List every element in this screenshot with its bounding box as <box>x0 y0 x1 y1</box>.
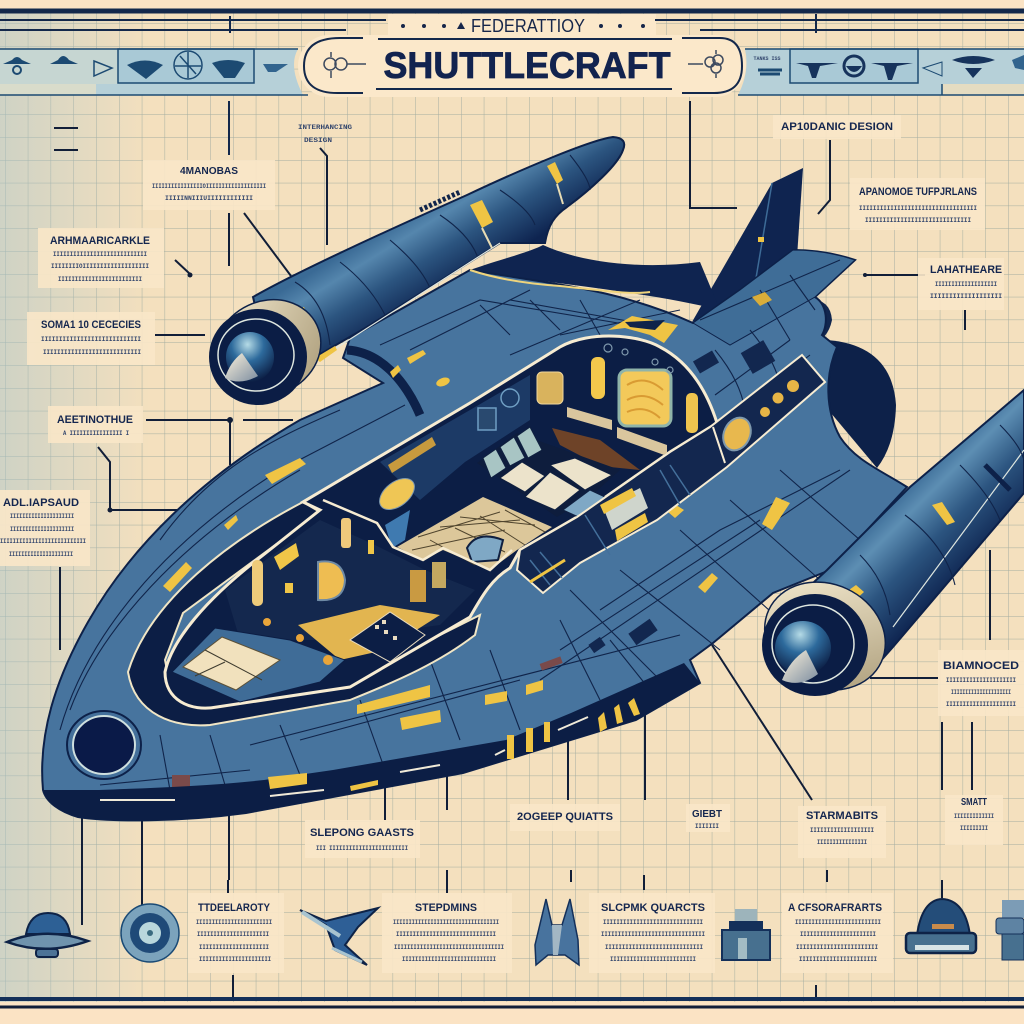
label: aerodynamic design: AP10DANIC DESION <box>781 121 893 133</box>
eyebrow dots <box>401 22 645 29</box>
label: soma: IIIIIIIIIIIIIIIIIIIIIIIIIIII <box>43 349 141 356</box>
icon: saucer 4 <box>871 63 913 80</box>
label: top centre caption: INTERHANCING <box>298 124 352 131</box>
bottom icon: pod <box>906 899 976 953</box>
hull panel lines <box>60 290 860 790</box>
label: archmaricarkle: ARHMAARICARKLE <box>50 235 150 247</box>
leader dots <box>108 272 867 512</box>
wall panel: controls <box>478 389 519 430</box>
label: archmaricarkle <box>38 228 164 288</box>
label: adlapsaud: IIIIIIIIIIIIIIIIIIIII <box>9 551 73 558</box>
wing panel lines <box>700 260 840 340</box>
label: bottom stepdmins <box>382 893 512 973</box>
sleeve window <box>600 488 648 541</box>
label: biamnoced <box>938 650 1024 716</box>
sleeve accent <box>530 560 565 582</box>
label: sleeping guests: SLEPONG GAASTS <box>310 827 414 839</box>
icon: round badge <box>844 56 864 76</box>
front bulkhead oval <box>374 472 420 516</box>
icon: flat ship <box>758 70 782 74</box>
engine shadow disc <box>820 340 896 468</box>
label: bottom tidelarity <box>188 893 284 973</box>
bottom icon: rocket <box>535 899 579 965</box>
right nacelle <box>747 390 1024 709</box>
label: bottom sleeping quarters: IIIIIIIIIIIIIIIIIIIIIIIIIIIIII <box>603 919 703 926</box>
label: bottom spacecraft parts: IIIIIIIIIIIIIIIIIIIIIII <box>799 956 877 963</box>
label: bottom spacecraft parts: IIIIIIIIIIIIIIIIIIIIIIII <box>796 944 878 951</box>
label: quarts <box>510 804 620 831</box>
main monitor <box>619 370 671 426</box>
label: soma <box>27 312 155 365</box>
lower dark skirt <box>43 663 700 820</box>
label: adlapsaud: IIIIIIIIIIIIIIIIIIIII <box>10 513 74 520</box>
title plaque <box>304 16 742 93</box>
label: bottom stepdmins: IIIIIIIIIIIIIIIIIIIIIIIIIIIII <box>402 956 496 963</box>
label: gieet: GIEBT <box>692 809 722 820</box>
label: smatt: IIIIIIIII <box>960 825 988 832</box>
sleeve lights <box>760 380 799 417</box>
label: quarts: 2OGEEP QUIATTS <box>517 811 613 823</box>
wing plate <box>693 250 855 345</box>
label: starmabits: STARMABITS <box>806 810 878 822</box>
rear engine bump <box>800 299 832 345</box>
label: bottom stepdmins: STEPDMINS <box>415 902 477 914</box>
arch icons <box>604 344 673 373</box>
stepped partition edge <box>323 500 512 570</box>
label: bottom tidelarity: IIIIIIIIIIIIIIIIIIIII <box>199 944 269 951</box>
pylon dark arc <box>347 350 420 415</box>
nose port <box>67 711 141 779</box>
label: gieet <box>686 804 730 832</box>
icon: gem saucer 2 <box>212 60 245 78</box>
label: aeetinothue <box>48 406 143 443</box>
label: soma: IIIIIIIIIIIIIIIIIIIIIIIIIIII <box>41 336 141 343</box>
label: amanobas: 4MANOBAS <box>180 166 238 177</box>
front chamber wall <box>225 520 475 640</box>
bottom icon: partial module <box>996 900 1024 960</box>
label: aeetinothue: A IIIIIIIIIIIIIIII I <box>63 430 129 437</box>
header rules <box>0 11 1024 155</box>
label: gieet: IIIIIII <box>695 823 719 830</box>
label: biamnoced: BIAMNOCED <box>943 660 1019 672</box>
icon: saucer 1 <box>3 57 31 74</box>
icon: right emblem <box>688 50 723 78</box>
label: smatt: SMATT <box>961 797 987 808</box>
top nacelle <box>199 137 624 413</box>
bench strips <box>567 407 667 456</box>
label: lahatheare: IIIIIIIIIIIIIIIIIII <box>930 293 1002 300</box>
hull hatch panels <box>588 340 775 653</box>
icon: saucer 2 <box>50 56 78 64</box>
label: bottom spacecraft parts <box>782 893 893 973</box>
label: biamnoced: IIIIIIIIIIIIIIIIIIIII <box>946 677 1016 684</box>
label: adlapsaud: IIIIIIIIIIIIIIIIIIIII <box>10 526 74 533</box>
front console <box>350 612 425 662</box>
label: archmaricarkle: IIIIIIIIIIIIIIIIIIIIIIIIIIII <box>53 251 147 258</box>
blue door panel <box>385 510 410 548</box>
yellow bar light <box>591 357 605 399</box>
front floor <box>298 605 440 660</box>
icon: small ship <box>1012 55 1024 70</box>
label: apanomoe: IIIIIIIIIIIIIIIIIIIIIIIIIIIIIIIIII <box>859 205 977 212</box>
bottom rules <box>0 999 1024 1007</box>
nacelle grille <box>420 192 460 210</box>
bottom icon: module <box>722 909 770 960</box>
label: bottom sleeping quarters: IIIIIIIIIIIIIIIIIIIIIIIIIIIII <box>605 944 703 951</box>
title plaque background <box>298 14 746 97</box>
label: bottom stepdmins: IIIIIIIIIIIIIIIIIIIIIIIIIIIIIIIIII <box>394 944 504 951</box>
label: apanomoe: IIIIIIIIIIIIIIIIIIIIIIIIIIIIII <box>865 217 971 224</box>
title: SHUTTLECRAFT <box>384 45 671 86</box>
label: lahatheare: IIIIIIIIIIIIIIIIIII <box>935 281 997 288</box>
label: bottom tidelarity: IIIIIIIIIIIIIIIIIIIIII <box>197 931 269 938</box>
cutaway shell <box>165 336 717 708</box>
top engine nozzle <box>199 283 337 413</box>
icon: gem saucer <box>127 60 163 79</box>
label: bottom sleeping quarters: IIIIIIIIIIIIIIIIIIIIIIIIII <box>610 956 696 963</box>
dorsal gold line <box>470 270 650 293</box>
sleeve oval light <box>718 413 756 455</box>
yellow panel tag <box>752 292 772 306</box>
label: aerodynamic design <box>773 115 901 139</box>
small caption: TANKS ISS <box>753 56 781 62</box>
label: adlapsaud: ADL.IAPSAUD <box>3 497 79 509</box>
icon: globe <box>174 51 202 79</box>
eyebrow: federation: FEDERATTIOY <box>471 16 585 36</box>
label: bottom spacecraft parts: IIIIIIIIIIIIIIIIIIIIIII <box>800 931 876 938</box>
label: bottom stepdmins: IIIIIIIIIIIIIIIIIIIIIIIIIIIIII <box>396 931 496 938</box>
yellow control panel on dorsal hull <box>608 316 678 343</box>
icon: left emblem <box>324 52 366 78</box>
yellow hull markings <box>163 458 790 791</box>
label: bottom spacecraft parts: A CFSORAFRARTS <box>788 902 882 914</box>
plaque frame <box>304 38 742 93</box>
label: top centre caption <box>298 124 352 144</box>
header band: right icon strip <box>738 49 1024 95</box>
label: amanobas: IIIIIIIIIIIIIIIIOIIIIIIIIIIIIIIIIIII <box>152 183 266 190</box>
label: lahatheare: LAHATHEARE <box>930 264 1002 276</box>
brown ledge <box>552 428 640 470</box>
red hull marks <box>172 656 563 787</box>
front bench base <box>172 628 345 702</box>
label: amanobas <box>143 160 275 210</box>
front wall lights <box>252 518 446 606</box>
mosaic display <box>537 372 563 404</box>
label: adlapsaud <box>0 490 90 566</box>
right engine nozzle <box>747 563 903 709</box>
sofa <box>477 427 620 520</box>
label: archmaricarkle: IIIIIIIIIIIIIIIIIIIIIIIII <box>58 276 142 283</box>
label: bottom spacecraft parts: IIIIIIIIIIIIIIIIIIIIIIIIII <box>795 919 881 926</box>
icon: triangle <box>94 61 112 76</box>
label: starmabits: IIIIIIIIIIIIIIIIIII <box>810 827 874 834</box>
starboard machinery sleeve <box>517 355 825 593</box>
icon: saucer 3 <box>796 63 838 78</box>
label: adlapsaud: IIIIIIIIIIIIIIIIIIIIIIIIIII <box>0 538 86 545</box>
rear cabin wall panels <box>380 375 530 500</box>
dorsal fin <box>692 168 803 322</box>
bottom icon: saucer <box>7 913 88 957</box>
main hull <box>42 250 907 820</box>
label: apanomoe <box>850 178 985 230</box>
small chair <box>467 536 503 562</box>
icon: small ship <box>263 64 288 72</box>
front bench lights <box>263 618 333 665</box>
label: bottom tidelarity: IIIIIIIIIIIIIIIIIIIIIIII <box>196 919 272 926</box>
icon: triangle outline <box>923 62 942 76</box>
bed <box>183 637 280 690</box>
label: smatt <box>945 795 1003 845</box>
icon: saucer 5 <box>952 56 995 78</box>
cutaway interior <box>165 336 717 708</box>
bottom icon: plane <box>300 908 378 965</box>
floor <box>397 497 552 570</box>
label: bottom tidelarity: IIIIIIIIIIIIIIIIIIIIII <box>199 956 271 963</box>
label: apanomoe: APANOMOE TUFPJRLANS <box>859 186 977 198</box>
bottom icon: disc <box>121 904 179 962</box>
label: starmabits: IIIIIIIIIIIIIIII <box>817 839 867 846</box>
spacecraft illustration <box>42 137 1024 820</box>
label: aeetinothue: AEETINOTHUE <box>57 414 133 426</box>
cabin outer dark ring <box>128 502 480 725</box>
label: archmaricarkle: IIIIIIIIOIIIIIIIIIIIIIIIIIII <box>51 263 149 270</box>
label: bottom sleeping quarters <box>589 893 715 973</box>
label: smatt: IIIIIIIIIIIII <box>954 813 994 820</box>
pylon yellow accents <box>390 350 451 388</box>
label: starmabits <box>798 806 886 858</box>
skirt white dashes <box>100 717 588 800</box>
label: top centre caption: DESIGN <box>304 137 333 144</box>
label: amanobas: IIIIINNIIIUIIIIIIIIIIII <box>165 195 253 202</box>
right wall bar light <box>686 393 698 433</box>
header band: left icon strip <box>0 49 308 95</box>
dark upper wing <box>470 245 720 310</box>
label: bottom tidelarity: TTDEELAROTY <box>198 902 271 914</box>
label: sleeping guests: III IIIIIIIIIIIIIIIIIIIIIIII <box>316 845 408 852</box>
label: lahatheare <box>918 258 1004 310</box>
label: biamnoced: IIIIIIIIIIIIIIIIIIIII <box>946 701 1016 708</box>
wall console strip <box>388 437 436 473</box>
label: bottom sleeping quarters: SLCPMK QUARCTS <box>601 902 705 914</box>
label: soma: SOMA1 10 CECECIES <box>41 319 141 331</box>
label: sleeping guests <box>305 820 420 858</box>
nacelle white trim <box>330 243 500 352</box>
label: bottom stepdmins: IIIIIIIIIIIIIIIIIIIIIIIIIIIIIIIIII <box>393 919 499 926</box>
label: bottom sleeping quarters: IIIIIIIIIIIIIIIIIIIIIIIIIIIIIII <box>601 931 705 938</box>
